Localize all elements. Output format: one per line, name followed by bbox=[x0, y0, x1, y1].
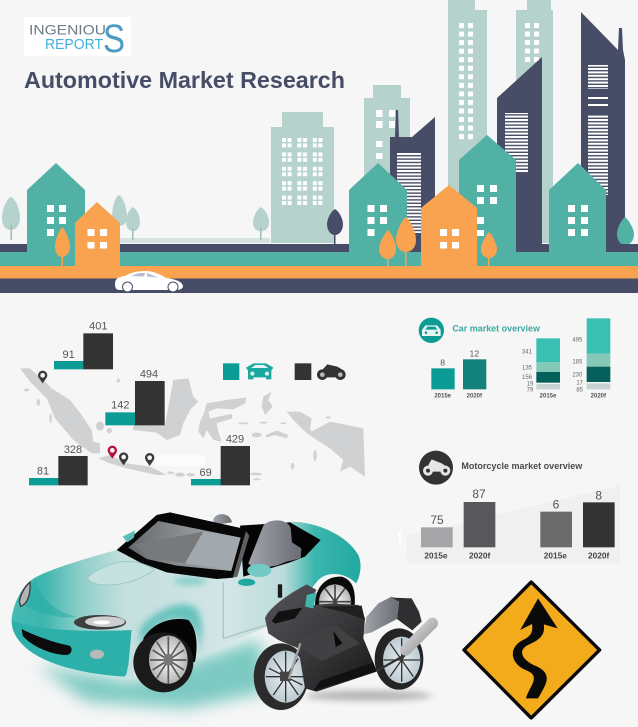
car body bbox=[12, 515, 361, 677]
car stacked bar chart 2015e: 135 bbox=[522, 366, 533, 372]
heading: car market overview: Car market overview bbox=[452, 323, 540, 333]
heading: motorcycle market overview: Motorcycle market overview bbox=[461, 461, 582, 471]
motorcycle bar chart right: 2015e bbox=[544, 551, 567, 561]
front fender highlight bbox=[140, 604, 202, 657]
tail section bbox=[392, 598, 422, 630]
exhaust rod bbox=[377, 655, 405, 671]
orange trees bbox=[55, 217, 497, 266]
title: Automotive Market Research bbox=[24, 67, 345, 93]
house windows bbox=[47, 185, 588, 248]
front grille bbox=[22, 629, 72, 655]
windshield-base teal glow bbox=[173, 578, 207, 584]
regional bars: Kalimantan bbox=[105, 368, 165, 425]
icon: winding road sign bbox=[464, 582, 600, 718]
motorcycle bar chart right bbox=[540, 488, 615, 561]
car bar chart: 2015e bbox=[434, 394, 452, 400]
regional bars: north Sumatra bbox=[54, 321, 113, 369]
regional bars: north Sumatra: 91 bbox=[63, 349, 75, 361]
regional bars: north Sumatra: 401 bbox=[89, 321, 107, 333]
side mirrors bbox=[123, 530, 271, 586]
logo: REPORT bbox=[45, 36, 103, 53]
side panel bbox=[300, 625, 360, 661]
light background buildings bbox=[120, 0, 553, 243]
regional bars: west Java bbox=[29, 444, 88, 485]
car stacked bar chart 2020f: 185 bbox=[572, 359, 583, 365]
front wheel arch bbox=[143, 619, 197, 678]
logo bbox=[24, 17, 131, 61]
windshield bbox=[117, 512, 249, 579]
car stacked bar chart 2015e: 79 bbox=[527, 388, 534, 394]
motorcycle front wheel bbox=[254, 643, 308, 710]
motorcycle bar chart right: 6 bbox=[553, 498, 560, 512]
belly pan bbox=[313, 662, 377, 691]
car ground shadow bbox=[37, 638, 267, 708]
front bumper panel bbox=[12, 620, 132, 677]
motorcycle chart backdrop bbox=[407, 485, 620, 563]
hero skyline illustration bbox=[0, 0, 638, 293]
motorcycle bar chart left: 75 bbox=[430, 513, 444, 527]
motorcycle bar chart right: 2020f bbox=[588, 551, 610, 561]
icon: white car on road bbox=[115, 271, 183, 292]
car bar chart: 12 bbox=[470, 348, 479, 358]
logo: INGENIOU bbox=[29, 22, 106, 38]
car stacked bar chart 2015e: 341 bbox=[522, 350, 533, 356]
orange houses bbox=[75, 185, 477, 266]
front headlight lens bbox=[272, 608, 302, 624]
car stacked bar chart 2015e: 156 bbox=[522, 375, 533, 381]
hood shading bbox=[24, 580, 77, 617]
car stacked bar chart 2015e: 2015e bbox=[540, 394, 557, 400]
regional bars: west Java: 81 bbox=[37, 466, 49, 478]
car stacked bar chart 2020f: 2020f bbox=[591, 394, 606, 400]
light building windows bbox=[282, 23, 539, 205]
Indonesia map panel bbox=[20, 321, 365, 485]
map of Indonesia bbox=[20, 368, 365, 480]
windscreen cowl bbox=[305, 592, 317, 608]
legend bbox=[223, 363, 346, 380]
car bar chart: 2020f bbox=[467, 394, 482, 400]
car stacked bar chart 2020f: 17 bbox=[576, 381, 584, 387]
car stacked bar chart 2020f: 85 bbox=[576, 387, 584, 393]
illustration: teal convertible car bbox=[12, 512, 361, 708]
car stacked bar chart 2015e bbox=[522, 338, 560, 400]
handlebar bbox=[273, 584, 286, 598]
motorcycle shadow bbox=[305, 690, 432, 701]
rear wheel bbox=[315, 577, 355, 628]
background trees bbox=[2, 195, 634, 253]
car stacked bar chart 2020f: 495 bbox=[572, 337, 583, 343]
white sliver beside chart bbox=[398, 530, 401, 548]
motorcycle rear wheel bbox=[375, 628, 423, 690]
map pins bbox=[38, 371, 154, 466]
road bbox=[0, 266, 638, 293]
car stacked bar chart 2015e: 19 bbox=[527, 382, 534, 388]
seat bbox=[363, 597, 399, 634]
illustration: black sport motorcycle bbox=[254, 584, 432, 710]
car bar chart bbox=[431, 348, 486, 400]
motorcycle bar chart left: 2020f bbox=[469, 551, 491, 561]
regional bars: east Java: 429 bbox=[226, 434, 244, 446]
motorcycle bar chart right: 8 bbox=[595, 488, 602, 502]
white patch on map bbox=[155, 455, 205, 466]
regional bars: west Java: 328 bbox=[64, 444, 82, 456]
icon: car badge bbox=[419, 318, 444, 343]
front fork bbox=[289, 643, 300, 679]
car stacked bar chart 2020f: 230 bbox=[572, 373, 583, 379]
tank top bbox=[320, 606, 365, 620]
ground strips bbox=[0, 244, 638, 266]
exhaust pipe bbox=[406, 623, 432, 650]
car bar chart: 8 bbox=[440, 358, 445, 368]
regional bars: Kalimantan: 494 bbox=[140, 368, 158, 380]
motorcycle fairing bbox=[265, 584, 377, 692]
car stacked bar chart 2020f bbox=[572, 318, 610, 400]
door line bbox=[223, 582, 268, 638]
front wheel bbox=[133, 632, 193, 692]
hood outline bbox=[88, 561, 154, 585]
headlights bbox=[19, 582, 126, 659]
dark towers bbox=[390, 12, 625, 252]
dark tower window stripes bbox=[397, 65, 608, 233]
icon: motorcycle badge bbox=[419, 451, 453, 485]
seats and cockpit bbox=[213, 514, 321, 577]
motorcycle bar chart left: 87 bbox=[472, 487, 486, 501]
motorcycle bar chart left bbox=[421, 487, 495, 561]
regional bars: Kalimantan: 142 bbox=[111, 400, 129, 412]
teal houses bbox=[27, 135, 606, 266]
motorcycle bar chart left: 2015e bbox=[424, 551, 448, 561]
regional bars: east Java: 69 bbox=[200, 467, 212, 479]
logo: S bbox=[103, 17, 125, 61]
regional bars: east Java bbox=[191, 434, 250, 485]
car and motorcycle market overview panel bbox=[398, 318, 620, 563]
